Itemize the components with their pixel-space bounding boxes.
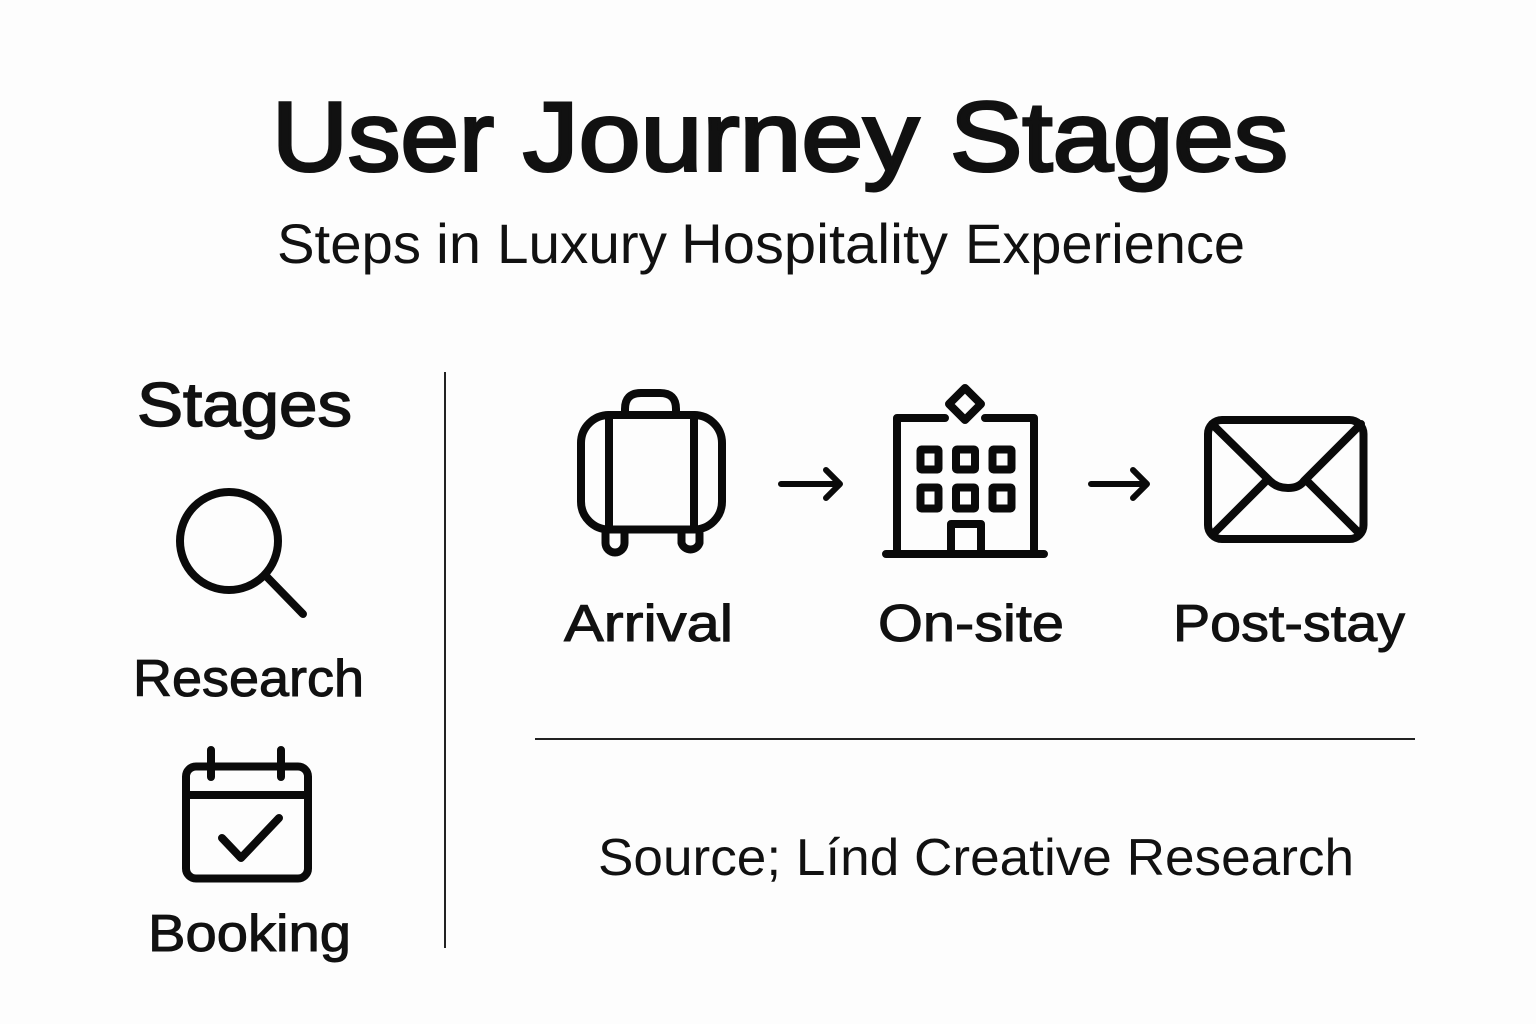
icon: suitcase	[581, 393, 722, 552]
subtitle: Luxury	[497, 212, 667, 275]
label: post-stay: Post-stay	[1173, 595, 1405, 653]
subtitle: Experience	[965, 212, 1245, 275]
title: Journey	[523, 82, 919, 192]
arrow: on-site to post-stay	[1091, 470, 1147, 498]
panel: stages sidebar	[133, 371, 364, 963]
icon: envelope	[1208, 420, 1364, 539]
vertical divider	[444, 372, 446, 948]
panel: journey flow	[564, 388, 1405, 653]
subtitle: Hospitality	[681, 212, 948, 275]
subtitle: Steps	[277, 212, 421, 275]
icon: calendar with check mark	[186, 750, 308, 878]
title: Stages	[950, 82, 1288, 192]
subtitle: in	[436, 212, 481, 275]
label: arrival: Arrival	[564, 595, 733, 653]
label: booking: Booking	[148, 905, 351, 963]
icon: hotel building	[886, 388, 1044, 554]
label: on-site: On-site	[878, 595, 1064, 653]
icon: magnifying glass	[180, 492, 303, 614]
source note: Source; Línd Creative Research	[598, 829, 1354, 887]
arrow: arrival to on-site	[781, 470, 840, 498]
title: User	[272, 82, 494, 192]
horizontal divider	[535, 738, 1415, 740]
heading: stages: Stages	[137, 371, 352, 440]
label: research: Research	[133, 650, 364, 708]
